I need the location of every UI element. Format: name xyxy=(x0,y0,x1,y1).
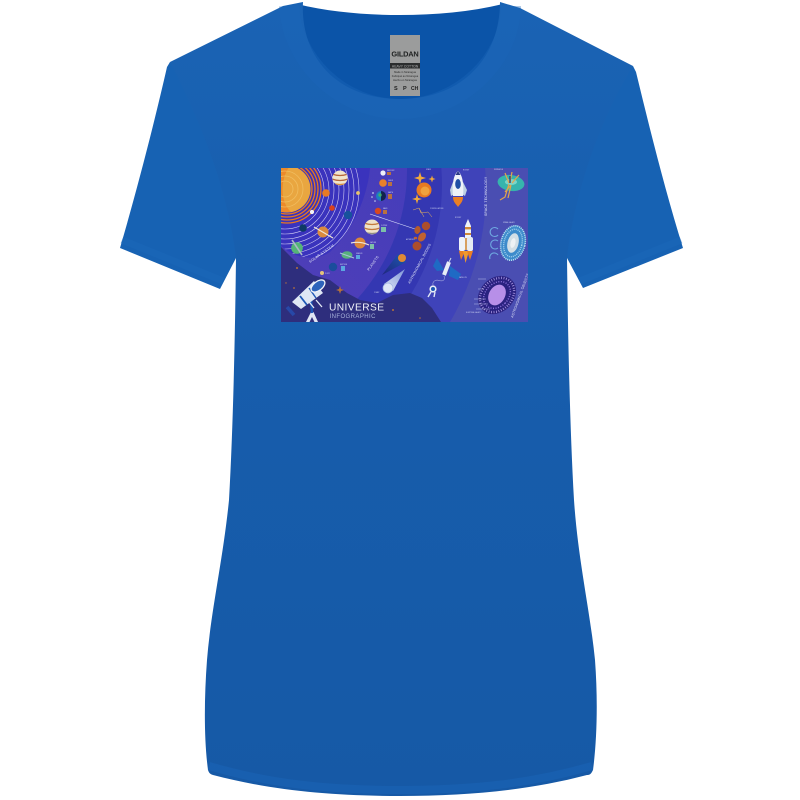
planet fact labels: MARS xyxy=(383,207,387,210)
panel: space technology band xyxy=(412,168,486,322)
icon: wormhole: WORMHOLE xyxy=(494,169,503,171)
icon: spiral galaxy xyxy=(497,221,529,263)
icon: dark planet xyxy=(299,224,307,232)
subtitle: infographic: INFOGRAPHIC xyxy=(330,314,376,320)
icon: neptune xyxy=(329,263,337,271)
shirt inside back neck xyxy=(297,4,503,100)
icon: purple galaxy xyxy=(466,268,524,322)
bottom hem xyxy=(209,766,592,790)
icon: space shuttle rocket: ROCKET xyxy=(463,170,469,172)
neck label tag: S xyxy=(394,86,398,92)
panel: solar system band xyxy=(281,168,370,258)
neck label tag xyxy=(390,35,420,96)
icon: saturn xyxy=(314,226,333,238)
section title: planets: PLANETS xyxy=(367,255,380,272)
universe infographic print xyxy=(281,168,528,322)
icon: launch vehicle xyxy=(455,217,473,263)
section title: space technology: SPACE TECHNOLOGY xyxy=(484,176,488,216)
telescope tube xyxy=(287,278,327,315)
brand name: GILDAN xyxy=(391,50,419,58)
title: universe: UNIVERSE xyxy=(329,302,384,314)
left sleeve xyxy=(120,62,260,289)
icon: comet xyxy=(374,269,405,294)
icon: mars xyxy=(375,208,381,214)
planet fact labels: URANUS xyxy=(356,252,362,255)
icon: comet: COMET xyxy=(374,292,380,294)
icon: satellite: SATELLITE xyxy=(459,276,467,279)
black size band: HEAVY COTTON xyxy=(392,64,419,68)
label small print: Made in Nicaragua xyxy=(394,70,416,74)
t-shirt xyxy=(120,2,683,796)
collar rib xyxy=(289,6,511,109)
icon: telescope xyxy=(287,278,327,322)
icon: meteor with dark tail xyxy=(382,254,406,275)
star labels xyxy=(426,168,443,210)
planet fact labels: MERCURY xyxy=(387,170,395,172)
planet fact labels: VENUS xyxy=(388,180,393,182)
icon: stars on hill xyxy=(285,267,421,319)
icon: mercury xyxy=(380,170,386,176)
icon: sparkle stars xyxy=(412,172,436,204)
planet fact labels: SATURN xyxy=(370,241,376,244)
icon: sun xyxy=(281,168,322,224)
star labels: CONSTELLATIONS xyxy=(430,207,443,210)
neck label tag: Fabriqué au Nicaragua xyxy=(392,74,419,78)
icon: green planet xyxy=(340,251,354,259)
planet fact labels: EARTH xyxy=(388,191,393,194)
icon: jupiter xyxy=(332,170,348,186)
panel: planets band xyxy=(281,168,407,298)
icon: astronaut xyxy=(428,276,444,297)
icon: launch vehicle: ROCKET xyxy=(455,217,461,219)
neck label tag: CH xyxy=(411,86,419,92)
right sleeve xyxy=(540,66,683,288)
neck label tag: P xyxy=(403,86,407,92)
section title: astronomical bodies: ASTRONOMICAL BODIES xyxy=(407,242,432,284)
section title: solar system: SOLAR SYSTEM xyxy=(308,244,335,264)
icon: pluto xyxy=(320,271,324,275)
icon: earth xyxy=(371,191,386,202)
shirt body xyxy=(170,2,633,796)
asteroid label: ASTEROIDS xyxy=(406,238,415,241)
solar system orbits xyxy=(281,168,360,258)
planet fact labels xyxy=(325,170,395,275)
planet fact labels: PLUTO xyxy=(325,273,331,275)
pointer line to asteroids xyxy=(370,214,415,229)
panel: astronomical bodies band xyxy=(358,168,442,303)
planets column xyxy=(320,170,387,275)
panel: astronomical objects background xyxy=(450,168,528,322)
solar system planets xyxy=(291,170,360,255)
icon: space shuttle rocket xyxy=(450,170,469,207)
icon: green ringed planet xyxy=(291,240,303,255)
right sleeve hem xyxy=(580,240,681,281)
telescope tripod xyxy=(306,298,322,322)
icon: blue planet xyxy=(344,211,352,219)
icon: red planet xyxy=(329,205,335,211)
icon: asteroids xyxy=(412,222,430,250)
neck label tag: Hecho en Nicaragua xyxy=(393,78,417,82)
section title: astronomical objects: ASTRONOMICAL OBJECTS xyxy=(510,272,530,318)
icon: galaxy type arcs xyxy=(490,228,498,259)
star labels: STARS xyxy=(426,168,431,171)
planet fact labels: JUPITER xyxy=(381,225,388,227)
icon: orange planet xyxy=(322,189,330,197)
planet fact labels: NEPTUNE xyxy=(340,264,347,266)
icon: purple galaxy: ELLIPTICAL GALAXY xyxy=(466,311,481,314)
icon: spiral galaxy: SPIRAL GALAXY xyxy=(503,221,515,224)
panel: dark hill foreground xyxy=(281,247,441,322)
icon: small yellow planet xyxy=(356,191,360,195)
title xyxy=(330,304,384,318)
icon: white planet xyxy=(310,210,314,214)
icon: orange star xyxy=(416,182,432,198)
icon: satellite xyxy=(433,258,467,280)
icon: constellation xyxy=(413,208,432,217)
icon: striped gas giant xyxy=(364,220,380,234)
left sleeve hem xyxy=(122,240,223,281)
icon: wormhole xyxy=(494,169,525,200)
icon: ringed planet xyxy=(351,238,369,248)
icon: venus xyxy=(379,179,387,187)
